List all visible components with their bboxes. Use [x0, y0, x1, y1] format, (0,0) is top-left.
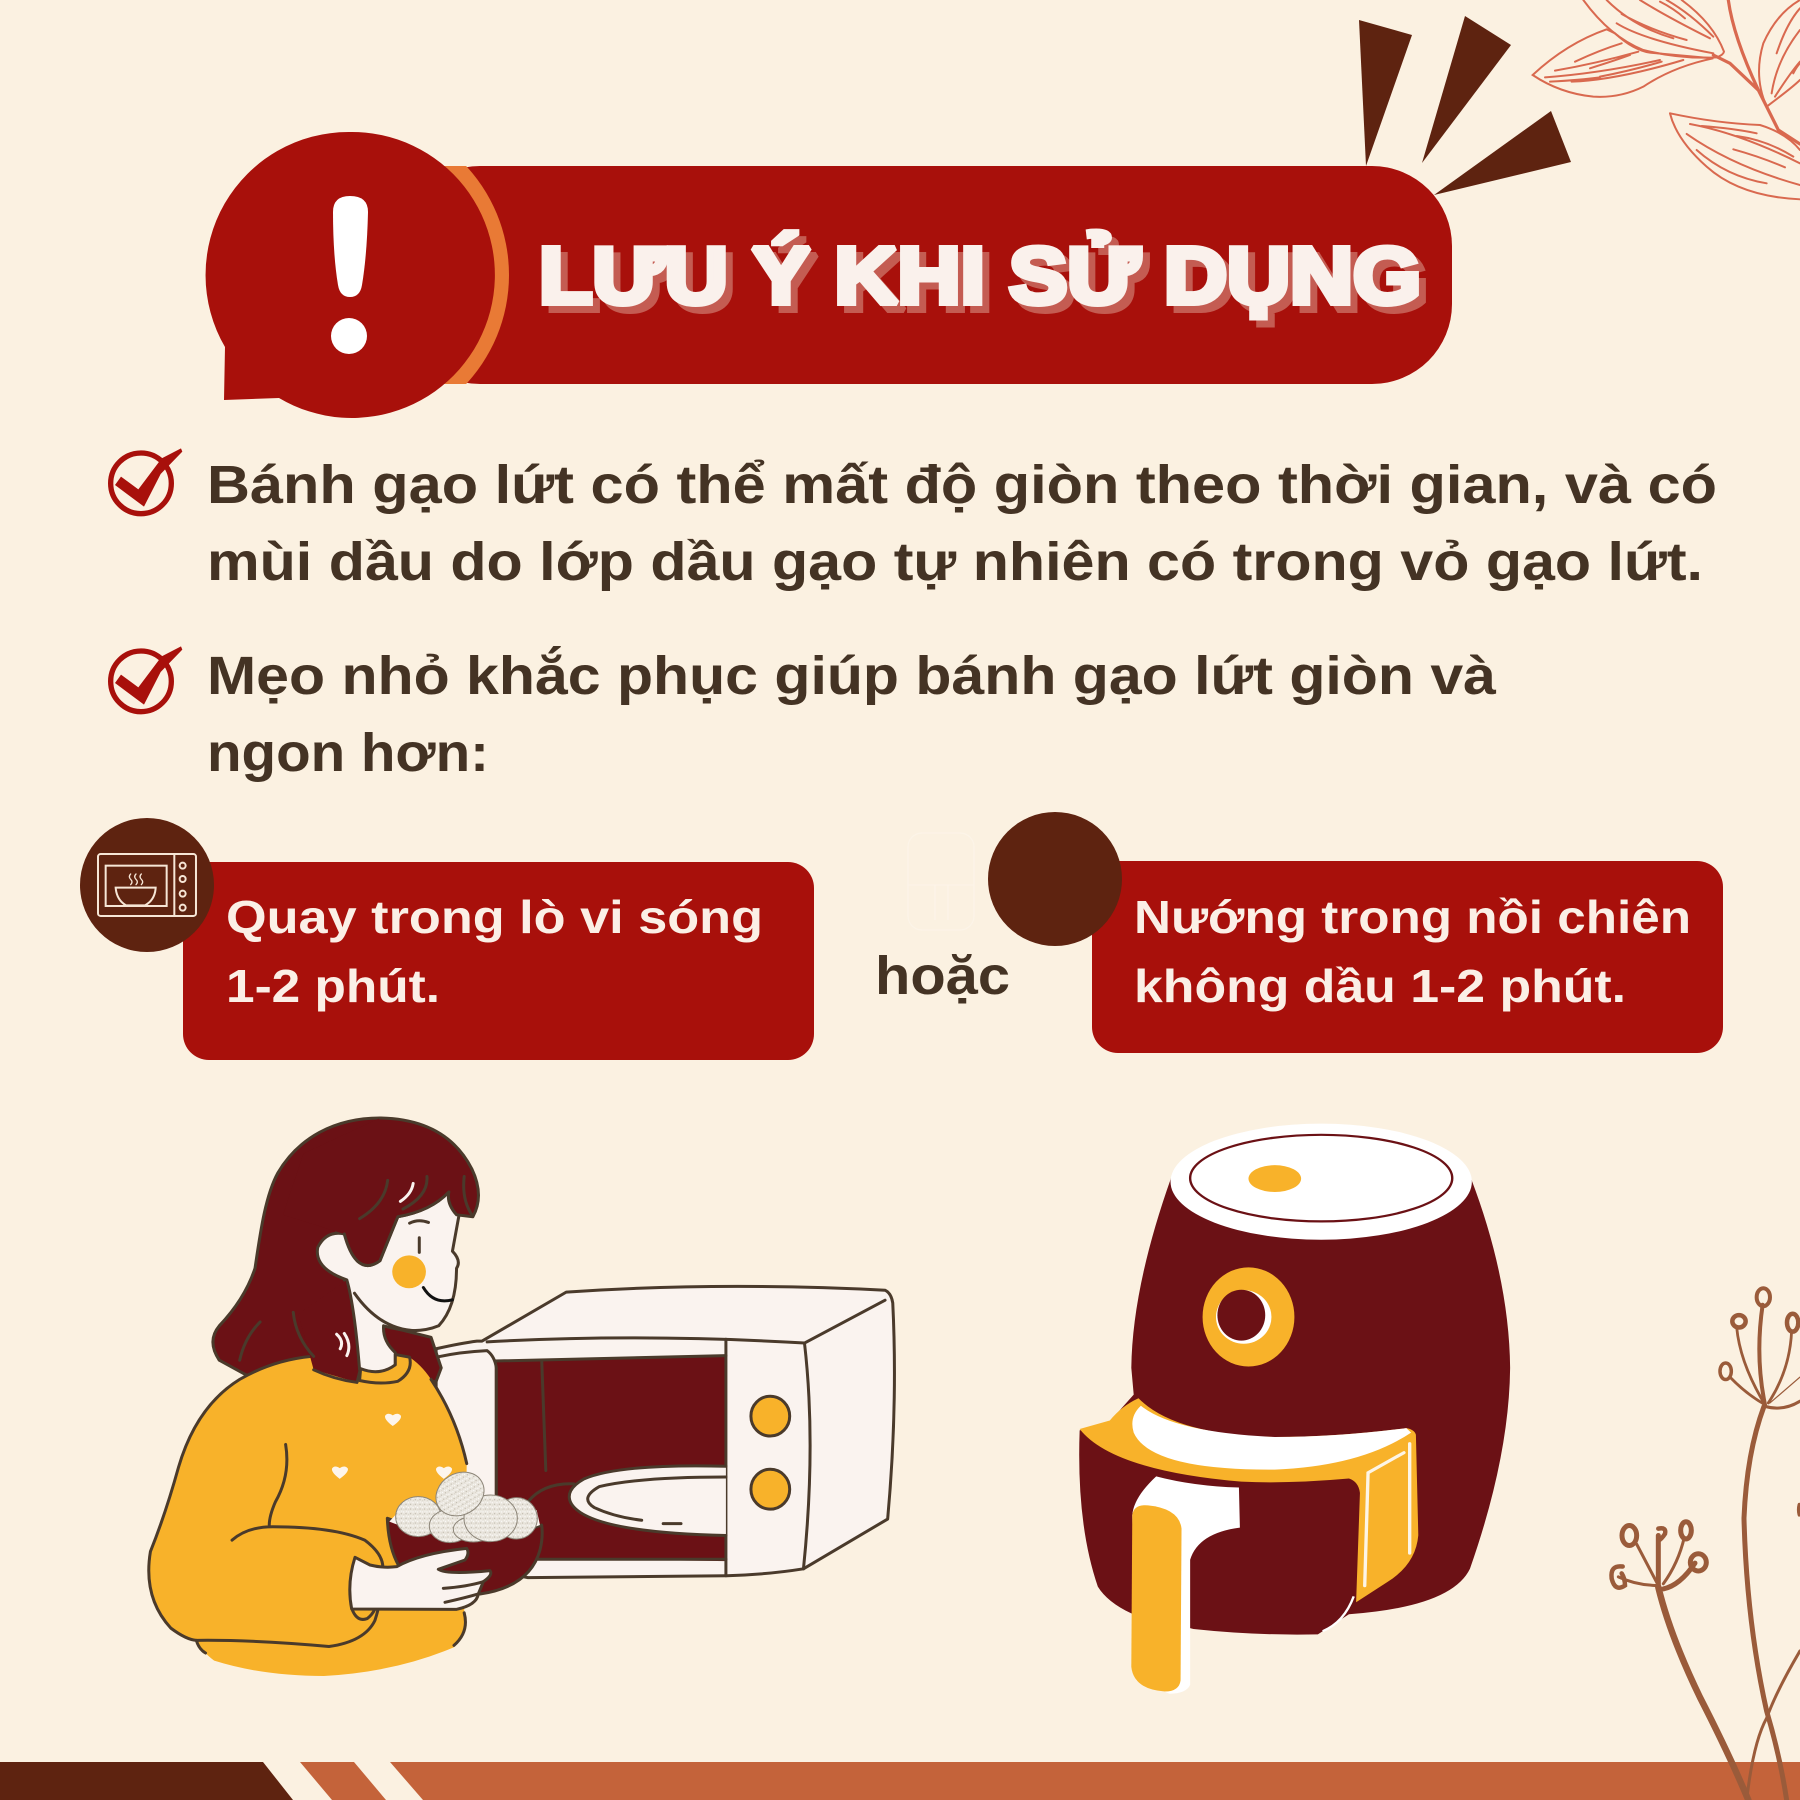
- button text: 1-2 phút.: [226, 960, 440, 1012]
- illustration: woman with microwave: [149, 1118, 894, 1676]
- dark stripe: [0, 1762, 293, 1800]
- orange bar: [390, 1762, 1800, 1800]
- bowl of rice cakes and hand: [350, 1464, 542, 1609]
- body text: [207, 646, 1497, 783]
- sweater: [149, 1356, 467, 1676]
- title banner: [206, 132, 1452, 418]
- fryer body: [1079, 1178, 1510, 1635]
- hair back: [213, 1118, 441, 1382]
- sweater details: [196, 1444, 465, 1653]
- tip 2: [111, 646, 1497, 783]
- icon: check mark: [111, 448, 182, 514]
- collar: [360, 1354, 410, 1383]
- decoration: dried plant bottom right: [1611, 1288, 1800, 1800]
- decoration: line-art leaves top right: [1533, 0, 1800, 199]
- hearts: [332, 1414, 452, 1479]
- icon: microwave badge: [80, 818, 214, 952]
- title text: LƯU Ý KHI SỬ DỤNG: [539, 231, 1421, 320]
- dial: [1203, 1267, 1294, 1367]
- connector word: hoặc: hoặc: [875, 946, 1010, 1006]
- face and neck: [317, 1192, 459, 1372]
- button panel: [1092, 861, 1723, 1053]
- facial features: [392, 1255, 426, 1288]
- button text: Quay trong lò vi sóng: [226, 891, 763, 943]
- tip 1: [111, 448, 1717, 592]
- body text: Bánh gạo lứt có thể mất độ giòn theo thời gian, và có: [207, 455, 1717, 515]
- hair lock over sweater: [298, 1280, 361, 1382]
- body text: mùi dầu do lớp dầu gạo tự nhiên có trong vỏ gạo lứt.: [207, 532, 1703, 592]
- callout: air fryer option: [988, 812, 1723, 1053]
- callout: microwave option: [80, 818, 814, 1060]
- body text: Mẹo nhỏ khắc phục giúp bánh gạo lứt giòn và: [207, 646, 1497, 706]
- title text shadow: LƯU Ý KHI SỬ DỤNG: [546, 238, 1428, 327]
- button panel: [183, 862, 814, 1060]
- illustration: air fryer: [1079, 1124, 1510, 1694]
- body text: [207, 455, 1717, 592]
- icon: exclamation mark: [331, 196, 368, 354]
- lid: [1171, 1124, 1472, 1240]
- hair front: [283, 1118, 478, 1266]
- orange stripe: [300, 1762, 386, 1800]
- button text: [226, 891, 763, 1012]
- handle: [1131, 1476, 1240, 1694]
- decoration: dark burst spikes: [1359, 16, 1571, 195]
- orange arc: [444, 166, 509, 384]
- drawer: [1080, 1398, 1418, 1631]
- microwave: [436, 1286, 894, 1578]
- woman figure: [149, 1118, 478, 1676]
- icon: faint air fryer outline: [908, 833, 974, 930]
- button text: không dầu 1-2 phút.: [1134, 960, 1626, 1012]
- icon: check mark: [111, 646, 182, 712]
- button text: [1134, 891, 1691, 1012]
- speech bubble: [206, 132, 495, 418]
- body text: ngon hơn:: [207, 723, 489, 783]
- button text: Nướng trong nồi chiên: [1134, 891, 1691, 943]
- icon: empty dark badge: [988, 812, 1122, 946]
- banner bar: [400, 166, 1452, 384]
- footer band: [0, 1762, 1800, 1800]
